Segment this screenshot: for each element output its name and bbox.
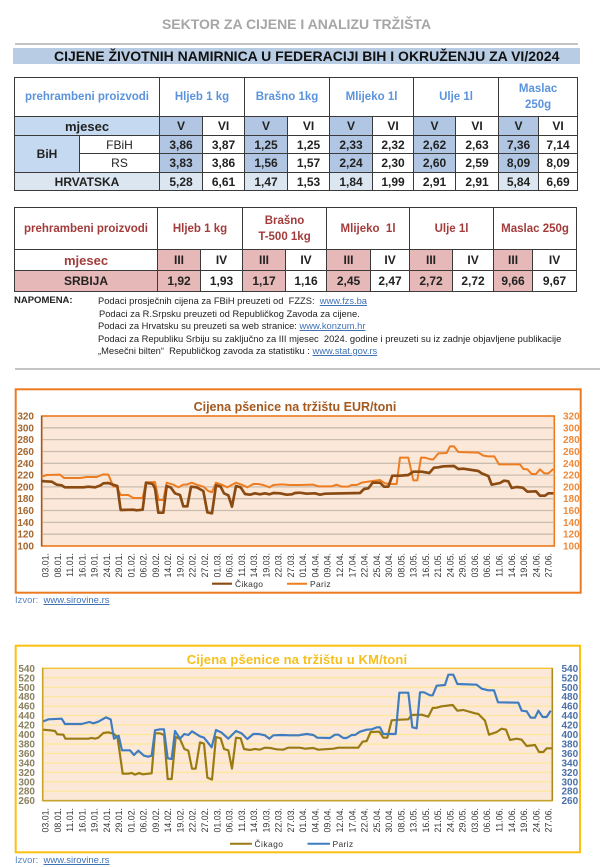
table: prices in Serbia: Hljeb 1 kg — [173, 222, 227, 234]
x axis date labels: 03.01. — [40, 808, 50, 832]
x axis date labels: 01.03. — [212, 808, 222, 832]
table: prices in BiH and Croatia: VI — [387, 119, 399, 133]
table: prices in Serbia: IV — [300, 253, 312, 267]
table: prices in BiH and Croatia: 2,91 — [465, 174, 489, 188]
source link 2: Izvor: www.sirovine.rs — [15, 855, 110, 866]
legend: Pariz — [310, 579, 331, 589]
table: prices in Serbia: Maslac 250g — [501, 222, 569, 234]
right axis labels: 340 — [562, 758, 579, 769]
x axis date labels: 12.04. — [335, 808, 345, 832]
x axis date labels: 09.04. — [323, 808, 333, 832]
table: prices in BiH and Croatia: Mlijeko 1l — [346, 91, 397, 103]
right axis labels: 300 — [562, 777, 579, 788]
left axis labels: 420 — [18, 721, 35, 732]
legend — [230, 839, 353, 849]
right axis labels: 200 — [563, 482, 580, 493]
legend: Čikago — [235, 579, 263, 589]
x axis date labels: 14.03. — [249, 553, 259, 577]
right axis labels: 440 — [562, 711, 579, 722]
left axis labels: 400 — [18, 730, 35, 741]
x axis date labels: 24.01. — [102, 808, 112, 832]
x axis date labels: 06.06. — [482, 808, 492, 832]
chart title: Cijena pšenice na tržištu EUR/toni — [194, 400, 396, 414]
left axis labels: 180 — [17, 494, 34, 505]
left axis labels: 300 — [17, 423, 34, 434]
table: prices in Serbia: III — [508, 253, 518, 267]
x axis date labels: 27.03. — [286, 553, 296, 577]
notes: „Mesečni bilten“ Republičkog zavoda za statistiku : www.stat.gov.rs — [98, 346, 377, 356]
table: prices in BiH and Croatia: 7,14 — [546, 138, 570, 152]
x axis date labels: 04.04. — [310, 808, 320, 832]
table: prices in BiH and Croatia: 2,62 — [423, 138, 446, 152]
x axis date labels: 25.04. — [372, 553, 382, 577]
x axis date labels: 16.01. — [77, 553, 87, 577]
x axis date labels: 13.05. — [409, 553, 419, 577]
left axis labels — [18, 664, 35, 807]
x axis date labels: 04.04. — [310, 553, 320, 577]
left axis labels: 540 — [18, 664, 35, 675]
x axis date labels: 14.02. — [163, 808, 173, 832]
table: prices in BiH and Croatia: 1,57 — [297, 156, 320, 170]
x axis date labels: 24.05. — [445, 553, 455, 577]
left axis labels: 160 — [17, 506, 34, 517]
chart: wheat price KM per tonne — [14, 644, 581, 854]
table: prices in Serbia: mjesec — [64, 252, 108, 268]
right axis labels: 160 — [563, 506, 580, 517]
left axis labels: 240 — [17, 459, 34, 470]
right axis labels — [563, 412, 580, 552]
table: prices in Serbia: Brašno — [265, 214, 304, 226]
x axis date labels: 14.03. — [249, 808, 259, 832]
plot area — [43, 668, 552, 801]
table: prices in BiH and Croatia: 1,25 — [254, 138, 278, 152]
left axis labels: 480 — [18, 692, 35, 703]
table: prices in BiH and Croatia: V — [177, 119, 185, 133]
left axis labels: 120 — [17, 530, 34, 541]
table: prices in BiH and Croatia: 5,84 — [507, 174, 530, 188]
right axis labels: 460 — [562, 702, 579, 713]
left axis labels: 360 — [18, 749, 35, 760]
left axis labels: 520 — [18, 673, 35, 684]
table: prices in Serbia: IV — [467, 253, 479, 267]
table: prices in BiH and Croatia — [14, 77, 578, 191]
left axis labels: 100 — [17, 542, 34, 552]
x axis date labels: 13.05. — [409, 808, 419, 832]
x axis date labels: 01.02. — [126, 553, 136, 577]
table: prices in Serbia: 9,67 — [543, 274, 566, 288]
table: prices in BiH and Croatia: 2,30 — [381, 156, 405, 170]
x axis date labels: 11.01. — [65, 553, 75, 577]
x axis date labels: 06.02. — [139, 808, 149, 832]
left axis labels: 220 — [17, 471, 34, 482]
x axis date labels: 09.02. — [151, 808, 161, 832]
table: prices in BiH and Croatia: HRVATSKA — [55, 174, 119, 188]
x axis date labels: 22.02. — [188, 553, 198, 577]
notes: Podaci prosječnih cijena za FBiH preuzeti od FZZS: www.fzs.ba — [98, 296, 367, 306]
x axis date labels: 30.04. — [384, 808, 394, 832]
chart title: Cijena pšenice na tržištu u KM/toni — [187, 652, 407, 667]
x axis date labels: 21.05. — [433, 553, 443, 577]
x axis date labels: 19.06. — [519, 808, 529, 832]
line: Pariz — [43, 675, 551, 759]
table: prices in Serbia — [14, 207, 577, 292]
notes: Podaci za R.Srpsku preuzeti od Republičkog Zavoda za cijene. — [99, 309, 360, 319]
table: prices in BiH and Croatia: 5,28 — [169, 174, 193, 188]
x axis date labels: 27.02. — [200, 553, 210, 577]
table: prices in BiH and Croatia: VI — [218, 119, 229, 133]
x axis date labels: 12.04. — [335, 553, 345, 577]
notes: Podaci za Republiku Srbiju su zaključno za III mjesec 2024. godine i preuzeti su iz zadnje objavljene publikacije — [98, 334, 561, 344]
heading: sector name: SEKTOR ZA CIJENE I ANALIZU TRŽIŠTA — [162, 16, 431, 32]
table: prices in BiH and Croatia: V — [431, 119, 439, 133]
right axis labels: 320 — [563, 412, 580, 422]
x axis date labels: 22.04. — [360, 808, 370, 832]
table: prices in BiH and Croatia: 3,83 — [169, 156, 193, 170]
x axis date labels: 19.01. — [90, 553, 100, 577]
table: prices in Serbia: prehrambeni proizvodi — [24, 222, 148, 234]
left axis labels: 280 — [17, 435, 34, 446]
table: prices in Serbia: 1,93 — [210, 274, 233, 288]
table: prices in Serbia: 1,17 — [252, 274, 276, 288]
x axis date labels: 08.05. — [396, 808, 406, 832]
x axis date labels: 19.02. — [176, 808, 186, 832]
right axis labels: 260 — [563, 447, 580, 458]
table: prices in Serbia: Mlijeko 1l — [341, 222, 396, 234]
x axis date labels: 03.01. — [40, 553, 50, 577]
left axis labels: 260 — [17, 447, 34, 458]
x axis date labels: 16.05. — [421, 553, 431, 577]
right axis labels: 420 — [562, 721, 579, 732]
table: prices in Serbia: T-500 1kg — [258, 230, 311, 242]
x axis date labels: 03.06. — [470, 553, 480, 577]
right axis labels: 100 — [563, 542, 580, 552]
left axis labels: 440 — [18, 711, 35, 722]
x axis date labels: 11.03. — [237, 808, 247, 832]
table: prices in BiH and Croatia: V — [262, 119, 270, 133]
left axis labels — [17, 412, 34, 552]
table: prices in Serbia: 2,45 — [337, 274, 360, 288]
x axis date labels: 27.06. — [544, 553, 554, 577]
x axis date labels: 11.06. — [494, 808, 504, 832]
right axis labels: 500 — [562, 683, 579, 694]
notes — [14, 295, 561, 356]
table: prices in BiH and Croatia: 2,59 — [465, 156, 489, 170]
table: prices in Serbia: 9,66 — [501, 274, 525, 288]
table: prices in Serbia: III — [259, 253, 269, 267]
x axis date labels: 27.02. — [200, 808, 210, 832]
line: Čikago — [43, 705, 552, 780]
title band: CIJENE ŽIVOTNIH NAMIRNICA U FEDERACIJI BIH I OKRUŽENJU ZA VI/2024 — [54, 48, 559, 64]
table: prices in BiH and Croatia: 8,09 — [546, 156, 570, 170]
x axis date labels: 01.03. — [212, 553, 222, 577]
right axis labels — [562, 664, 579, 807]
table: prices in BiH and Croatia: 7,36 — [507, 138, 530, 152]
right axis labels: 120 — [563, 530, 580, 541]
right axis labels: 320 — [562, 768, 579, 779]
legend: Pariz — [332, 839, 353, 849]
right axis labels: 220 — [563, 471, 580, 482]
x axis date labels: 19.03. — [261, 808, 271, 832]
x axis date labels: 01.04. — [298, 808, 308, 832]
table: prices in Serbia: IV — [549, 253, 560, 267]
x axis date labels: 14.06. — [507, 553, 517, 577]
x axis date labels: 24.05. — [445, 808, 455, 832]
right axis labels: 540 — [562, 664, 579, 675]
table: prices in BiH and Croatia: 1,99 — [381, 174, 405, 188]
x axis date labels: 22.03. — [274, 553, 284, 577]
table: prices in BiH and Croatia: 6,69 — [546, 174, 570, 188]
x axis date labels: 19.02. — [176, 553, 186, 577]
table: prices in BiH and Croatia: 2,32 — [381, 138, 405, 152]
x axis date labels: 11.06. — [494, 553, 504, 577]
left axis labels: 200 — [17, 482, 34, 493]
left axis labels: 320 — [18, 768, 35, 779]
x axis date labels: 01.04. — [298, 553, 308, 577]
x axis date labels: 29.05. — [458, 808, 468, 832]
table: prices in Serbia: IV — [384, 253, 396, 267]
left axis labels: 260 — [18, 796, 35, 807]
x axis date labels: 22.03. — [274, 808, 284, 832]
x axis date labels: 30.04. — [384, 553, 394, 577]
x axis date labels: 27.03. — [286, 808, 296, 832]
x axis date labels: 16.01. — [77, 808, 87, 832]
table: prices in Serbia: 2,47 — [378, 274, 402, 288]
right axis labels: 280 — [563, 435, 580, 446]
table: prices in BiH and Croatia: 2,24 — [339, 156, 363, 170]
table: prices in BiH and Croatia: 2,33 — [339, 138, 363, 152]
left axis labels: 500 — [18, 683, 35, 694]
x axis date labels: 17.04. — [347, 808, 357, 832]
source link 1: Izvor: www.sirovine.rs — [15, 595, 110, 606]
table: prices in BiH and Croatia: Hljeb 1 kg — [175, 91, 229, 103]
table: prices in Serbia: IV — [216, 253, 227, 267]
table: prices in BiH and Croatia: 1,53 — [297, 174, 320, 188]
x axis date labels: 19.03. — [261, 553, 271, 577]
left axis labels: 380 — [18, 740, 35, 750]
x axis date labels: 06.03. — [225, 808, 235, 832]
table: prices in BiH and Croatia: 8,09 — [507, 156, 530, 170]
table: prices in BiH and Croatia: 1,25 — [297, 138, 320, 152]
legend: Čikago — [254, 839, 283, 849]
table: prices in Serbia: 2,72 — [461, 274, 485, 288]
table: prices in BiH and Croatia: 6,61 — [212, 174, 235, 188]
x axis date labels: 14.02. — [163, 553, 173, 577]
table: prices in BiH and Croatia: V — [515, 119, 523, 133]
table: prices in BiH and Croatia: VI — [471, 119, 483, 133]
x axis date labels: 06.02. — [139, 553, 149, 577]
table: prices in BiH and Croatia: 1,84 — [339, 174, 363, 188]
x axis date labels: 06.06. — [482, 553, 492, 577]
table: prices in BiH and Croatia: 3,86 — [212, 156, 235, 170]
table: prices in Serbia: III — [174, 253, 184, 267]
table: prices in BiH and Croatia: 250g — [525, 99, 551, 111]
x axis date labels: 19.06. — [519, 553, 529, 577]
notes: NAPOMENA: — [14, 295, 73, 306]
right axis labels: 280 — [562, 787, 579, 798]
table: prices in BiH and Croatia: 2,91 — [423, 174, 446, 188]
table: prices in BiH and Croatia: 2,60 — [423, 156, 446, 170]
left axis labels: 340 — [18, 758, 35, 769]
x axis date labels: 11.03. — [237, 553, 247, 577]
right axis labels: 520 — [562, 673, 579, 684]
x axis date labels: 09.04. — [323, 553, 333, 577]
right axis labels: 360 — [562, 749, 579, 760]
left axis labels: 320 — [17, 412, 34, 422]
table: prices in BiH and Croatia: 3,87 — [212, 138, 235, 152]
table: prices in BiH and Croatia: Maslac — [519, 83, 557, 95]
x axis date labels: 06.03. — [225, 553, 235, 577]
table: prices in Serbia: 1,16 — [294, 274, 318, 288]
x axis date labels: 01.02. — [126, 808, 136, 832]
x axis date labels: 03.06. — [470, 808, 480, 832]
chart: wheat price EUR per tonne — [14, 388, 582, 594]
x axis date labels — [40, 553, 554, 577]
x axis date labels: 11.01. — [65, 808, 75, 832]
x axis date labels: 22.04. — [360, 553, 370, 577]
x axis date labels: 24.06. — [531, 808, 541, 832]
right axis labels: 480 — [562, 692, 579, 703]
x axis date labels — [40, 808, 554, 832]
x axis date labels: 24.01. — [102, 553, 112, 577]
right axis labels: 140 — [563, 518, 580, 529]
x axis date labels: 22.02. — [188, 808, 198, 832]
line: Pariz — [42, 446, 553, 500]
left axis labels: 140 — [17, 518, 34, 529]
chart frame — [16, 389, 581, 593]
right axis labels: 240 — [563, 459, 580, 470]
left axis labels: 460 — [18, 702, 35, 713]
table: prices in Serbia: 2,72 — [419, 274, 443, 288]
x axis date labels: 09.02. — [151, 553, 161, 577]
table: prices in BiH and Croatia: Ulje 1l — [439, 91, 473, 103]
table: prices in BiH and Croatia: 2,63 — [465, 138, 489, 152]
legend — [212, 579, 331, 589]
table: prices in BiH and Croatia: mjesec — [65, 118, 109, 134]
x axis date labels: 08.05. — [396, 553, 406, 577]
chart frame — [16, 646, 580, 852]
table: prices in Serbia: Ulje 1l — [435, 222, 468, 234]
right axis labels: 180 — [563, 494, 580, 505]
x axis date labels: 16.05. — [421, 808, 431, 832]
left axis labels: 300 — [18, 777, 35, 788]
table: prices in Serbia: III — [426, 253, 436, 267]
x axis date labels: 08.01. — [53, 808, 63, 832]
x axis date labels: 17.04. — [347, 553, 357, 577]
table: prices in BiH and Croatia: Brašno 1kg — [256, 91, 318, 103]
x axis date labels: 24.06. — [531, 553, 541, 577]
line: Čikago — [42, 466, 553, 513]
plot area — [42, 416, 554, 546]
x axis date labels: 14.06. — [507, 808, 517, 832]
table: prices in Serbia: SRBIJA — [64, 274, 108, 288]
table: prices in BiH and Croatia: 3,86 — [169, 138, 193, 152]
notes: Podaci za Hrvatsku su preuzeti sa web stranice: www.konzum.hr — [98, 321, 365, 331]
right axis labels: 260 — [562, 796, 579, 807]
x axis date labels: 27.06. — [544, 808, 554, 832]
x axis date labels: 29.01. — [114, 808, 124, 832]
right axis labels: 300 — [563, 423, 580, 434]
table: prices in Serbia: III — [344, 253, 354, 267]
table: prices in BiH and Croatia: 1,56 — [254, 156, 278, 170]
right axis labels: 400 — [562, 730, 579, 741]
table: prices in BiH and Croatia: FBiH — [106, 138, 133, 152]
table: prices in BiH and Croatia: V — [347, 119, 355, 133]
right axis labels: 380 — [562, 740, 579, 750]
table: prices in BiH and Croatia: RS — [111, 156, 128, 170]
x axis date labels: 08.01. — [53, 553, 63, 577]
table: prices in BiH and Croatia: 1,47 — [254, 174, 278, 188]
x axis date labels: 25.04. — [372, 808, 382, 832]
table: prices in BiH and Croatia: VI — [552, 119, 564, 133]
table: prices in Serbia: 1,92 — [167, 274, 191, 288]
x axis date labels: 29.01. — [114, 553, 124, 577]
x axis date labels: 29.05. — [458, 553, 468, 577]
x axis date labels: 21.05. — [433, 808, 443, 832]
table: prices in BiH and Croatia: VI — [303, 119, 314, 133]
table: prices in BiH and Croatia: BiH — [37, 147, 57, 161]
x axis date labels: 19.01. — [90, 808, 100, 832]
left axis labels: 280 — [18, 787, 35, 798]
table: prices in BiH and Croatia: prehrambeni proizvodi — [25, 91, 149, 103]
